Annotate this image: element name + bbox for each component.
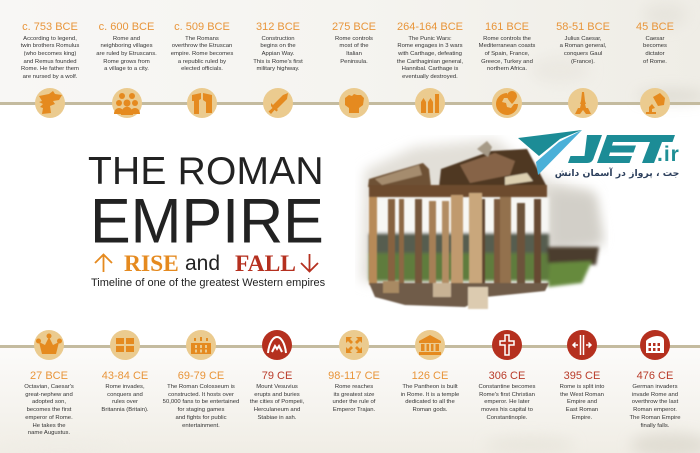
event: 395 CE: Empire and: [567, 399, 597, 405]
event: 45 BCE: Caesar: [646, 36, 664, 42]
event: 43-84 CE: conquers and: [107, 392, 143, 398]
event: 43-84 CE: [101, 330, 149, 413]
event: c. 509 BCE: a republic ruled by: [178, 59, 226, 65]
event: 69-79 CE: 50,000 fans to be entertained: [163, 399, 239, 405]
event: c. 600 BCE: are ruled by Etruscans.: [96, 51, 157, 57]
event: 264-164 BCE: with Carthage, defeating: [398, 51, 462, 57]
title: [88, 150, 325, 289]
event: 98-117 CE: under the rule of: [333, 399, 375, 405]
event: 27 BCE: [24, 330, 74, 436]
title line: Empire: EMPIRE: [90, 186, 324, 256]
event: 161 BCE: Rome controls the: [483, 36, 531, 42]
event: 69-79 CE: The Roman Colosseum is: [167, 384, 235, 390]
event: 27 BCE: Octavian, Caesar's: [24, 384, 74, 390]
event: 306 CE: Constantine becomes: [478, 384, 535, 390]
event: 312 BCE: [253, 21, 303, 118]
event: 161 BCE: northern Africa.: [487, 66, 527, 72]
event: 395 CE: [560, 330, 604, 421]
event: 476 CE: finally falls.: [641, 423, 669, 429]
event: 98-117 CE: its greatest size: [334, 392, 374, 398]
arrow: fall: [300, 254, 319, 273]
logo tagline: جت ، پرواز در آسمان دانش: [555, 168, 679, 179]
title line: The Roman: THE ROMAN: [88, 150, 324, 193]
logo text: .ir: .ir: [657, 143, 680, 166]
event: 161 BCE: of Spain, France,: [485, 51, 529, 57]
event: 264-164 BCE: Rome engages in 3 wars: [397, 43, 463, 49]
event: 58-51 BCE: Julius Caesar,: [564, 36, 602, 42]
event: 27 BCE: becomes the first: [27, 407, 71, 413]
event: c. 753 BCE: (who becomes king): [24, 51, 76, 57]
event: 476 CE: invade Rome and: [632, 392, 678, 398]
event: 312 BCE: 312 BCE: [256, 21, 300, 33]
event: 98-117 CE: [328, 330, 380, 413]
event: 264-164 BCE: the Carthaginian general,: [397, 59, 463, 65]
arrow: rise: [94, 253, 113, 272]
event: c. 600 BCE: c. 600 BCE: [99, 21, 154, 33]
event: 395 CE: East Roman: [566, 407, 598, 413]
event: c. 509 BCE: overthrow the Etruscan: [172, 43, 232, 49]
event: c. 753 BCE: Rome. He father them: [21, 66, 79, 72]
event: 69-79 CE: and fights for public: [175, 415, 227, 421]
event: 45 BCE: [636, 21, 674, 118]
event: 69-79 CE: [162, 330, 239, 429]
event: 27 BCE: adopted son,: [32, 399, 66, 405]
event: 126 CE: [401, 330, 459, 413]
top timeline line: [0, 102, 700, 105]
event: 476 CE: [629, 330, 681, 429]
event: c. 753 BCE: [20, 21, 80, 118]
event: c. 509 BCE: The Romans: [185, 36, 219, 42]
bottom textured band: [0, 346, 700, 453]
event: 58-51 BCE: [556, 21, 610, 118]
event: c. 753 BCE: and Remus founded: [23, 59, 77, 65]
event: 476 CE: Roman emperor.: [633, 407, 677, 413]
event: 98-117 CE: Emperor Trajan.: [333, 407, 375, 413]
event: 27 BCE: 27 BCE: [30, 370, 68, 382]
event: 79 CE: erupts and buries: [254, 392, 300, 398]
event: 161 BCE: 161 BCE: [485, 21, 529, 33]
illustration: roman ruins watercolour: [356, 136, 608, 310]
event: 58-51 BCE: a Roman general,: [560, 43, 606, 49]
logo mark: [518, 130, 675, 175]
event: 79 CE: Mount Vesuvius: [256, 384, 298, 390]
event: c. 509 BCE: elected officials.: [181, 66, 223, 72]
event: 306 CE: [478, 330, 536, 421]
event: 27 BCE: He takes the: [32, 423, 66, 429]
event: 312 BCE: Appian Way.: [262, 51, 294, 57]
event: 264-164 BCE: 264-164 BCE: [397, 21, 463, 33]
event: 476 CE: The Roman Empire: [629, 415, 681, 421]
event: 264-164 BCE: Hannibal. Carthage is: [402, 66, 458, 72]
logo: 7JET.ir: [518, 130, 680, 179]
event: 43-84 CE: 43-84 CE: [102, 370, 148, 382]
event: 306 CE: moves his capital to: [481, 407, 533, 413]
event: 312 BCE: This is Rome's first: [253, 59, 303, 65]
event: 275 BCE: most of the: [339, 43, 369, 49]
event: 43-84 CE: rules over: [112, 399, 138, 405]
event: c. 509 BCE: c. 509 BCE: [174, 21, 230, 33]
event: 306 CE: Constantinople.: [487, 415, 527, 421]
event: 161 BCE: Mediterranean coasts: [479, 43, 535, 49]
event: 161 BCE: [479, 21, 536, 118]
event: 79 CE: the cities of Pompeii,: [250, 399, 304, 405]
event: 395 CE: Rome is split into: [560, 384, 604, 390]
event: 69-79 CE: constructed. It hosts over: [168, 392, 234, 398]
event: 306 CE: 306 CE: [489, 370, 525, 382]
event: c. 753 BCE: are nursed by a wolf.: [23, 74, 77, 80]
event: 476 CE: overthrow the last: [632, 399, 678, 405]
event: 43-84 CE: Britannia (Britain).: [101, 407, 149, 413]
event: 45 BCE: dictator: [645, 51, 665, 57]
event: 312 BCE: Construction: [261, 36, 295, 42]
bottom timeline line: [0, 345, 700, 348]
word: and: and: [185, 252, 220, 275]
event: 264-164 BCE: The Punic Wars:: [408, 36, 452, 42]
event: 79 CE: Herculaneum and: [254, 407, 300, 413]
event: c. 509 BCE: empire. Rome becomes: [171, 51, 233, 57]
event: 45 BCE: of Rome.: [643, 59, 667, 65]
word: fall: FALL: [235, 251, 296, 277]
event: 395 CE: the West Roman: [560, 392, 604, 398]
event: c. 600 BCE: a village to a city.: [104, 66, 149, 72]
event: 126 CE: Roman gods.: [412, 407, 448, 413]
event: 27 BCE: name Augustus.: [28, 430, 70, 436]
event: 27 BCE: emperor of Rome.: [25, 415, 73, 421]
event: c. 753 BCE: c. 753 BCE: [22, 21, 78, 33]
event: 275 BCE: Italian: [346, 51, 362, 57]
event: 45 BCE: 45 BCE: [636, 21, 674, 33]
event: 312 BCE: begins on the: [260, 43, 296, 49]
event: 161 BCE: Greece, Turkey and: [481, 59, 533, 65]
subtitle: rise and fall: [94, 251, 319, 277]
event: c. 600 BCE: Rome grows from: [103, 59, 150, 65]
event: 275 BCE: Rome controls: [335, 36, 373, 42]
event: 58-51 BCE: (France).: [571, 59, 595, 65]
event: 58-51 BCE: conquers Gaul: [564, 51, 602, 57]
event: c. 753 BCE: twin brothers Romulus: [21, 43, 79, 49]
tagline: Timeline of one of the greatest Western empires: [91, 277, 325, 289]
event: 476 CE: German invaders: [632, 384, 678, 390]
event: 395 CE: 395 CE: [564, 370, 600, 382]
event: 98-117 CE: Rome reaches: [335, 384, 373, 390]
event: 126 CE: in Rome. It is a temple: [401, 392, 459, 398]
event: 395 CE: Empire.: [572, 415, 592, 421]
event: 275 BCE: Peninsula.: [340, 59, 368, 65]
word: rise: RISE: [124, 251, 179, 277]
top textured band: [0, 0, 700, 103]
event: 98-117 CE: 98-117 CE: [328, 370, 380, 382]
event: 306 CE: emperor. He later: [484, 399, 530, 405]
event: 476 CE: 476 CE: [637, 370, 673, 382]
event: 69-79 CE: 69-79 CE: [178, 370, 224, 382]
event: 69-79 CE: for staging games: [178, 407, 224, 413]
event: c. 600 BCE: [96, 21, 157, 118]
event: 264-164 BCE: eventually destroyed.: [402, 74, 458, 80]
event: 27 BCE: great-nephew and: [25, 392, 73, 398]
event: c. 600 BCE: neighboring villages: [100, 43, 153, 49]
event: 126 CE: 126 CE: [412, 370, 448, 382]
event: 312 BCE: military highway.: [256, 66, 300, 72]
event: 126 CE: dedicated to all the: [405, 399, 455, 405]
event: c. 509 BCE: [171, 21, 234, 118]
event: 79 CE: [250, 330, 304, 421]
event: 306 CE: Rome's first Christian: [479, 392, 535, 398]
event: 79 CE: Stabiae in ash.: [258, 415, 296, 421]
event: 264-164 BCE: [396, 21, 463, 118]
event: 69-79 CE: entertainment.: [182, 423, 220, 429]
event: c. 600 BCE: Rome and: [113, 36, 140, 42]
event: 79 CE: 79 CE: [262, 370, 292, 382]
event: 275 BCE: [332, 21, 376, 118]
event: 43-84 CE: Rome invades,: [105, 384, 145, 390]
event: c. 753 BCE: According to legend,: [23, 36, 77, 42]
event: 275 BCE: 275 BCE: [332, 21, 376, 33]
event: 45 BCE: becomes: [643, 43, 667, 49]
event: 58-51 BCE: 58-51 BCE: [556, 21, 610, 33]
event: 126 CE: The Pantheon is built: [402, 384, 458, 390]
